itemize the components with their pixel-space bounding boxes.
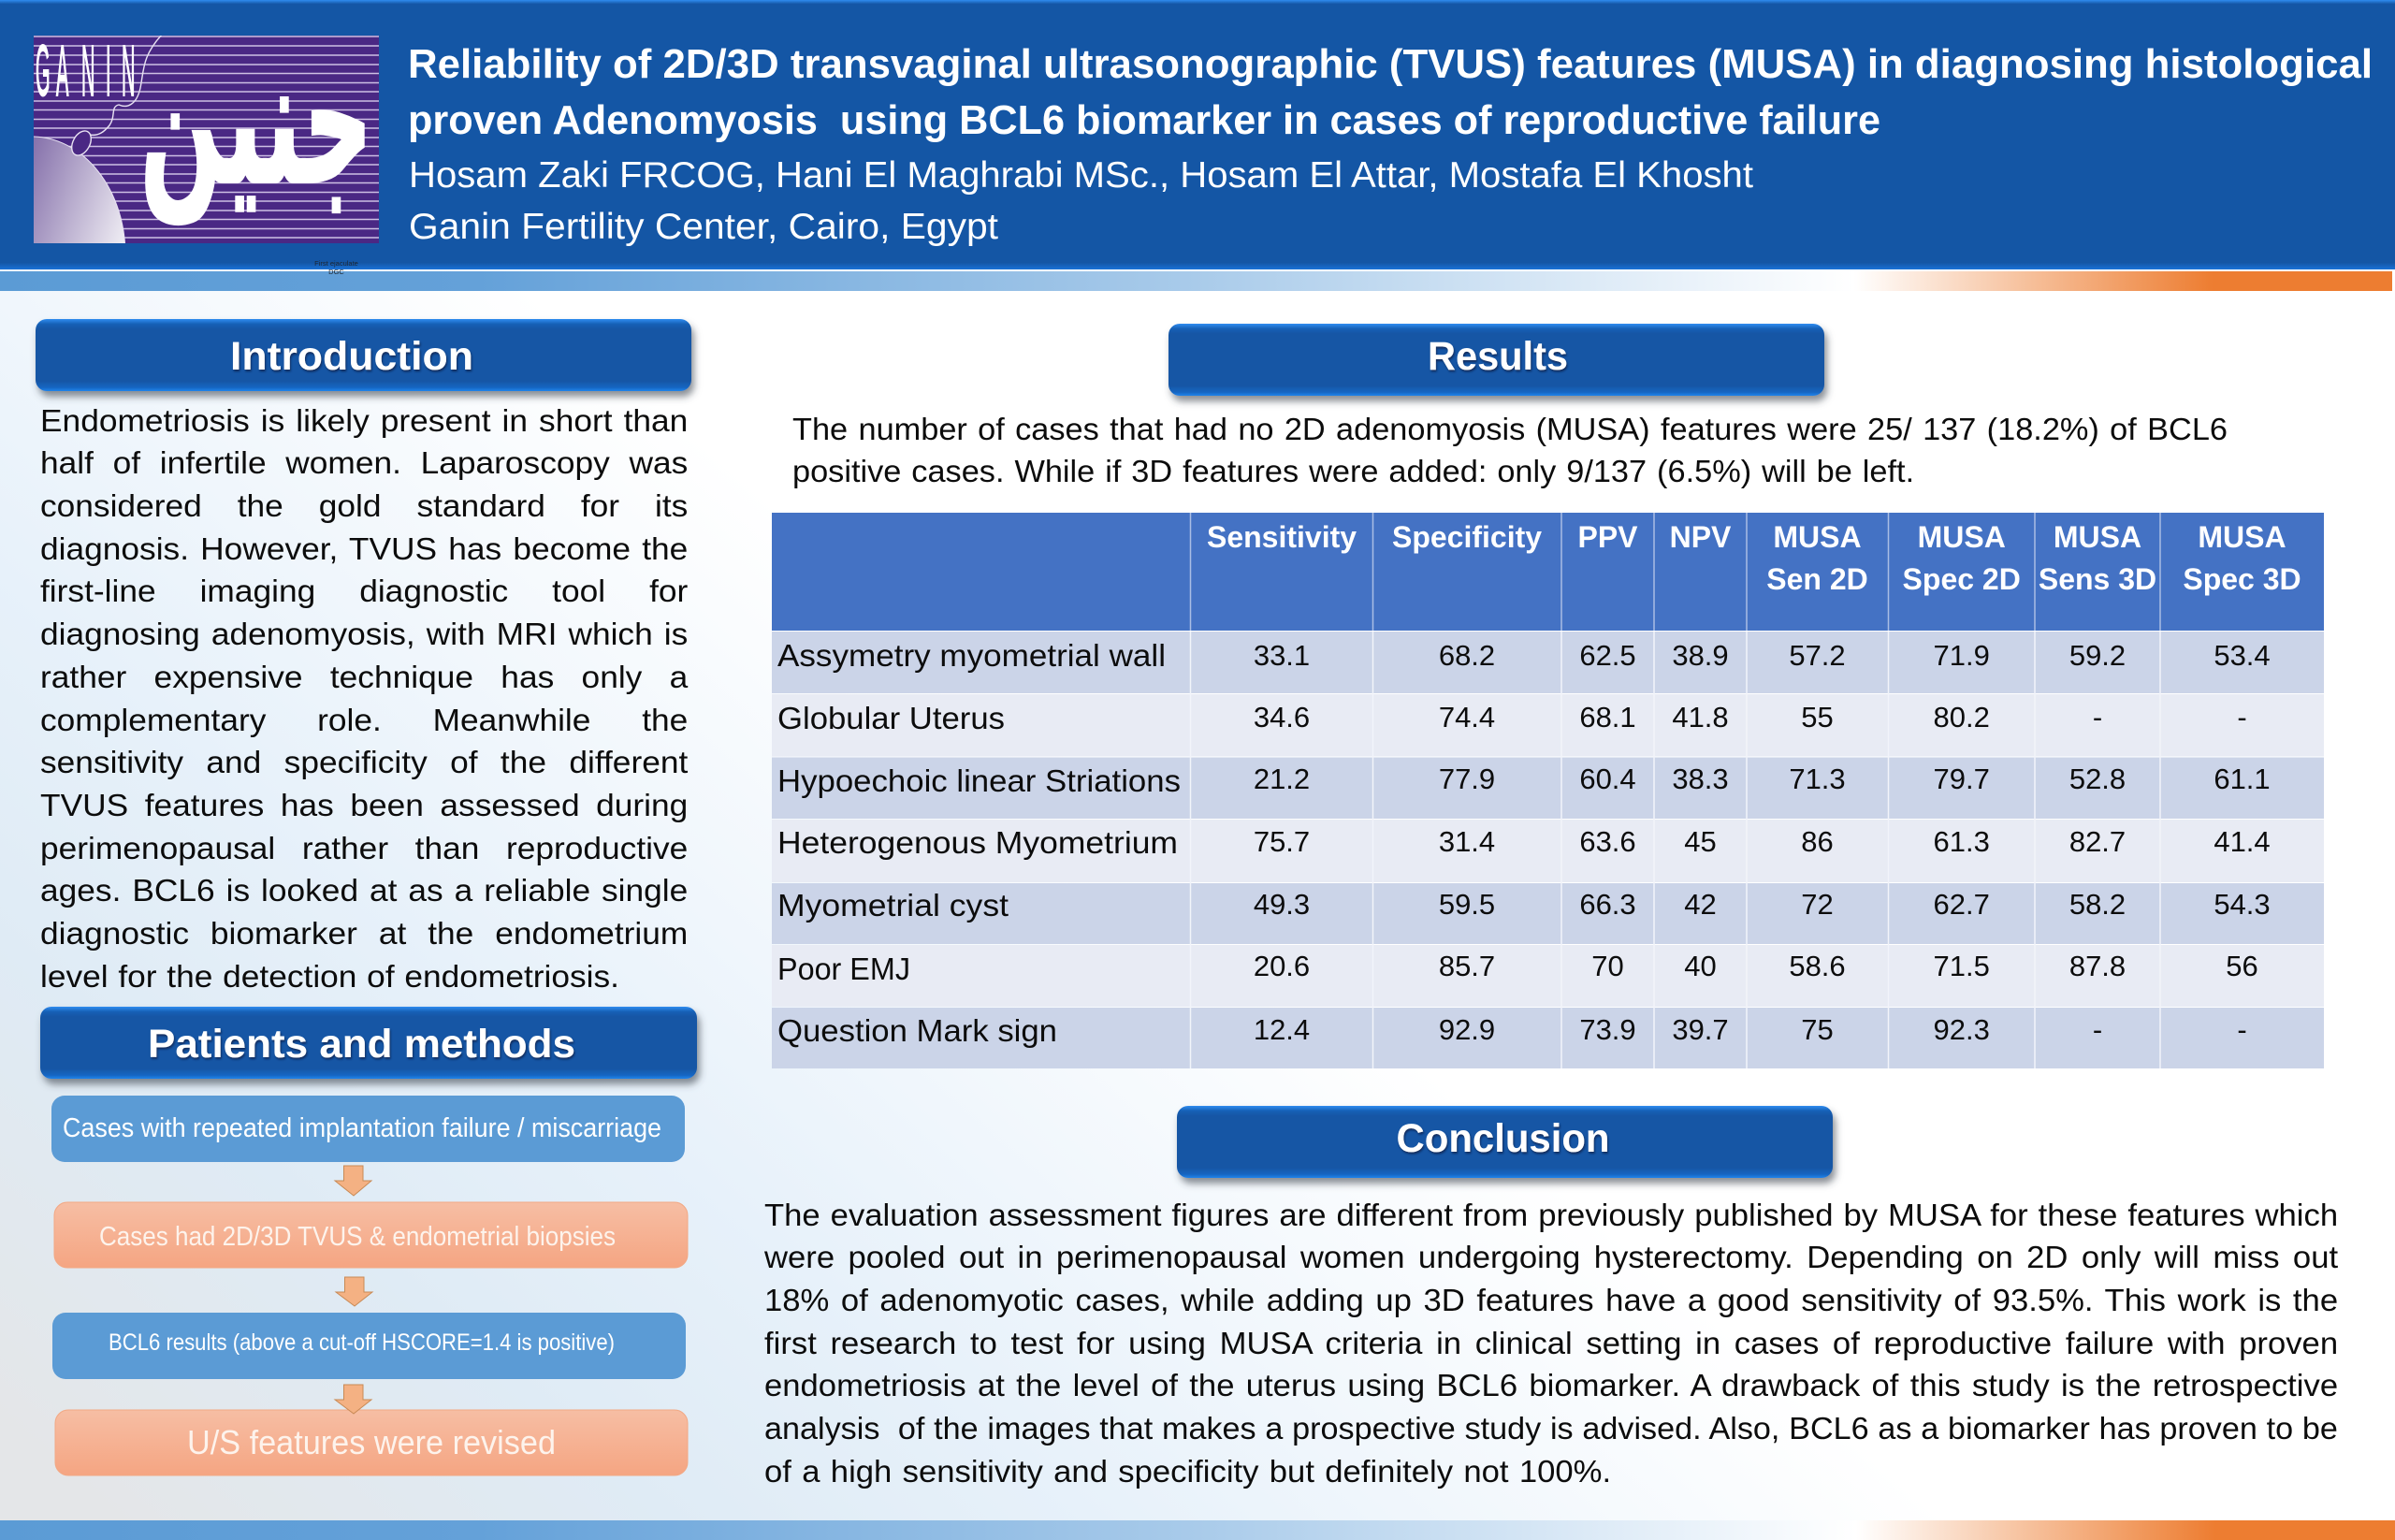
arrow 2 <box>336 1277 372 1306</box>
row: Heterogenous Myometrium <box>777 825 2271 860</box>
row: Heterogenous Myometrium: 45 <box>1684 825 1717 858</box>
row: Heterogenous Myometrium: 61.3 <box>1934 825 1990 858</box>
row: Poor EMJ: 70 <box>1591 950 1624 982</box>
row: Assymetry myometrial wall: 68.2 <box>1439 639 1495 672</box>
flow step 2 <box>54 1202 688 1268</box>
introduction text: diagnostic biomarker at the endometrium <box>40 916 688 951</box>
flow step 1 <box>51 1096 685 1162</box>
table header row: MUSA <box>2198 520 2286 554</box>
row: Heterogenous Myometrium: 86 <box>1801 825 1834 858</box>
row: Poor EMJ: Poor EMJ <box>777 952 910 986</box>
row: Globular Uterus: 41.8 <box>1672 701 1729 734</box>
row: Globular Uterus: 55 <box>1801 701 1834 734</box>
row: Question Mark sign: 92.9 <box>1439 1013 1495 1046</box>
conclusion text: were pooled out in perimenopausal women undergoing hysterectomy. Depending on 2D only will miss out <box>764 1240 2338 1274</box>
table header row: MUSA <box>1918 520 2006 554</box>
header banner <box>0 0 2395 269</box>
heading: Results <box>1168 324 1824 396</box>
introduction text: half of infertile women. Laparoscopy was <box>40 445 688 480</box>
row: Globular Uterus: 74.4 <box>1439 701 1495 734</box>
table header row: Specificity <box>1392 520 1542 554</box>
heading: Results: Results <box>1428 334 1568 379</box>
results summary text: The number of cases that had no 2D adenomyosis (MUSA) features were 25/ 137 (18.2%) of BCL6 <box>792 412 2228 446</box>
table header row: MUSA <box>2054 520 2141 554</box>
table header row: Sens 3D <box>2039 562 2156 596</box>
row: Poor EMJ: 56 <box>2226 950 2258 982</box>
row: Question Mark sign: - <box>2237 1013 2247 1046</box>
tiny logo caption <box>314 259 358 276</box>
heading: Introduction: Introduction <box>230 334 473 379</box>
row: Globular Uterus: 34.6 <box>1254 701 1310 734</box>
affiliation: Ganin Fertility Center, Cairo, Egypt <box>409 207 998 247</box>
row: Myometrial cyst: 66.3 <box>1579 888 1636 921</box>
row: Assymetry myometrial wall: 62.5 <box>1579 639 1636 672</box>
row: Myometrial cyst: 42 <box>1684 888 1717 921</box>
title <box>408 41 2373 143</box>
row: Heterogenous Myometrium: 63.6 <box>1579 825 1636 858</box>
row: Myometrial cyst: 72 <box>1801 888 1834 921</box>
row: Globular Uterus: - <box>2237 701 2247 734</box>
row: Hypoechoic linear Striations: 77.9 <box>1439 763 1495 795</box>
row: Hypoechoic linear Striations <box>777 763 2271 798</box>
table header row: Spec 2D <box>1903 562 2021 596</box>
row: Assymetry myometrial wall <box>777 638 2271 673</box>
row: Hypoechoic linear Striations: 61.1 <box>2214 763 2271 795</box>
conclusion text: endometriosis at the level of the uterus using BCL6 biomarker. A drawback of this study is the retrospective <box>764 1368 2338 1402</box>
results summary text: positive cases. While if 3D features were added: only 9/137 (6.5%) will be left. <box>792 454 1914 488</box>
table header row <box>772 513 2324 631</box>
introduction text: Endometriosis is likely present in short than <box>40 403 688 438</box>
row: Hypoechoic linear Striations: 71.3 <box>1789 763 1846 795</box>
row: Myometrial cyst: 49.3 <box>1254 888 1310 921</box>
row: Globular Uterus: Globular Uterus <box>777 701 1005 735</box>
introduction text: sensitivity and specificity of the different <box>40 745 688 779</box>
row: Hypoechoic linear Striations: 52.8 <box>2069 763 2126 795</box>
row: Poor EMJ: 40 <box>1684 950 1717 982</box>
row: Myometrial cyst <box>777 888 2271 923</box>
table header row: PPV <box>1577 520 1638 554</box>
conclusion text: of a high sensitivity and specificity but definitely not 100%. <box>764 1454 1611 1489</box>
introduction text: level for the detection of endometriosis. <box>40 959 619 994</box>
row: Assymetry myometrial wall: 71.9 <box>1934 639 1990 672</box>
row: Assymetry myometrial wall: 38.9 <box>1672 639 1729 672</box>
row: Question Mark sign <box>777 1013 2247 1048</box>
introduction text: TVUS features has been assessed during <box>40 788 688 822</box>
row: Heterogenous Myometrium: 75.7 <box>1254 825 1310 858</box>
table header row: Spec 3D <box>2183 562 2301 596</box>
row: Hypoechoic linear Striations: 79.7 <box>1934 763 1990 795</box>
table row stripes <box>772 632 2324 1068</box>
introduction text <box>40 403 689 994</box>
row: Assymetry myometrial wall: 59.2 <box>2069 639 2126 672</box>
row: Question Mark sign: Question Mark sign <box>777 1013 1057 1048</box>
title: Reliability of 2D/3D transvaginal ultrasonographic (TVUS) features (MUSA) in diagnosing histological <box>408 41 2373 87</box>
row: Question Mark sign: 75 <box>1801 1013 1834 1046</box>
row: Poor EMJ: 71.5 <box>1934 950 1990 982</box>
title: proven Adenomyosis using BCL6 biomarker in cases of reproductive failure <box>408 97 1880 143</box>
row: Question Mark sign: - <box>2093 1013 2102 1046</box>
row: Myometrial cyst: 59.5 <box>1439 888 1495 921</box>
row: Question Mark sign: 39.7 <box>1672 1013 1729 1046</box>
table header row: MUSA <box>1773 520 1862 554</box>
row: Myometrial cyst: 58.2 <box>2069 888 2126 921</box>
row: Assymetry myometrial wall: 53.4 <box>2214 639 2271 672</box>
row: Hypoechoic linear Striations: 60.4 <box>1579 763 1636 795</box>
row: Poor EMJ: 58.6 <box>1789 950 1846 982</box>
row: Assymetry myometrial wall: 57.2 <box>1789 639 1846 672</box>
introduction text: complementary role. Meanwhile the <box>40 702 688 737</box>
row: Globular Uterus: 68.1 <box>1579 701 1636 734</box>
flow step 1: Cases with repeated implantation failure / miscarriage <box>63 1113 661 1143</box>
table header row: NPV <box>1670 520 1732 554</box>
introduction text: diagnosing adenomyosis, with MRI which is <box>40 617 688 651</box>
heading: Patients and methods: Patients and methods <box>148 1022 575 1067</box>
arrow 3 <box>335 1385 371 1414</box>
top accent band <box>0 271 2392 291</box>
introduction text: first-line imaging diagnostic tool for <box>40 574 688 608</box>
results table <box>772 513 2324 1068</box>
flow step 3 <box>52 1313 686 1379</box>
conclusion text <box>764 1198 2338 1489</box>
conclusion text: analysis of the images that makes a prospective study is advised. Also, BCL6 as a biomarker has proven to be <box>764 1411 2338 1446</box>
row: Globular Uterus <box>777 701 2247 735</box>
conclusion text: first research to test for using MUSA criteria in clinical setting in cases of reproductive failure with proven <box>764 1326 2338 1360</box>
row: Globular Uterus: - <box>2093 701 2102 734</box>
row: Myometrial cyst: 62.7 <box>1934 888 1990 921</box>
row: Heterogenous Myometrium: 41.4 <box>2214 825 2271 858</box>
row: Myometrial cyst: Myometrial cyst <box>777 888 1009 923</box>
heading: Conclusion <box>1177 1106 1833 1178</box>
authors: Hosam Zaki FRCOG, Hani El Maghrabi MSc., Hosam El Attar, Mostafa El Khosht <box>409 155 1753 196</box>
row: Globular Uterus: 80.2 <box>1934 701 1990 734</box>
flow step 4 <box>55 1410 688 1475</box>
introduction text: rather expensive technique has only a <box>40 660 688 694</box>
introduction text: perimenopausal rather than reproductive <box>40 831 688 865</box>
introduction text: considered the gold standard for its <box>40 488 688 523</box>
row: Heterogenous Myometrium: 31.4 <box>1439 825 1495 858</box>
row: Heterogenous Myometrium: Heterogenous Myometrium <box>777 825 1178 860</box>
row: Question Mark sign: 12.4 <box>1254 1013 1310 1046</box>
row: Hypoechoic linear Striations: 21.2 <box>1254 763 1310 795</box>
heading: Conclusion: Conclusion <box>1396 1116 1609 1161</box>
row: Heterogenous Myometrium: 82.7 <box>2069 825 2126 858</box>
row: Poor EMJ <box>777 950 2258 986</box>
heading: Patients and methods <box>40 1007 697 1079</box>
row: Assymetry myometrial wall: Assymetry myometrial wall <box>777 638 1166 673</box>
flow step 3: BCL6 results (above a cut-off HSCORE=1.4 is positive) <box>109 1329 615 1356</box>
arrow 1 <box>335 1166 371 1196</box>
row: Hypoechoic linear Striations: Hypoechoic linear Striations <box>777 763 1181 798</box>
row: Question Mark sign: 92.3 <box>1934 1013 1990 1046</box>
tiny logo caption: First ejaculate <box>314 259 358 268</box>
conclusion text: 18% of adenomyotic cases, while adding up 3D features have a good sensitivity of 93.5%. This work is the <box>764 1283 2338 1317</box>
introduction text: diagnosis. However, TVUS has become the <box>40 531 688 566</box>
logo: Ganin Fertility Center: جنين <box>140 21 372 225</box>
conclusion text: The evaluation assessment figures are different from previously published by MUSA for these features which <box>764 1198 2338 1232</box>
tiny logo caption: DGC <box>328 268 344 276</box>
table header row: Sen 2D <box>1766 562 1868 596</box>
table header row: Sensitivity <box>1207 520 1357 554</box>
logo: Ganin Fertility Center: GANIN <box>36 30 135 110</box>
flow step 4: U/S features were revised <box>187 1423 556 1461</box>
logo: Ganin Fertility Center <box>34 36 379 243</box>
heading: Introduction <box>36 319 691 391</box>
row: Poor EMJ: 20.6 <box>1254 950 1310 982</box>
row: Question Mark sign: 73.9 <box>1579 1013 1636 1046</box>
row: Poor EMJ: 87.8 <box>2069 950 2126 982</box>
results summary text <box>792 412 2228 488</box>
row: Poor EMJ: 85.7 <box>1439 950 1495 982</box>
row: Hypoechoic linear Striations: 38.3 <box>1672 763 1729 795</box>
row: Assymetry myometrial wall: 33.1 <box>1254 639 1310 672</box>
flow step 2: Cases had 2D/3D TVUS & endometrial biopsies <box>99 1222 616 1252</box>
bottom accent band <box>0 1520 2395 1540</box>
row: Myometrial cyst: 54.3 <box>2214 888 2271 921</box>
introduction text: ages. BCL6 is looked at as a reliable single <box>40 873 688 908</box>
